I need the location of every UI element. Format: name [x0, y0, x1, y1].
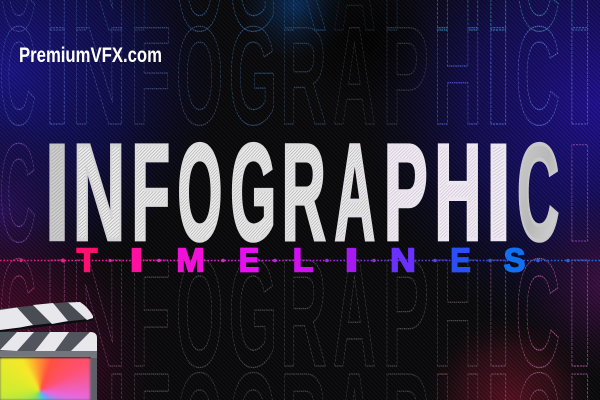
subtitle: TIMELINES: L	[293, 243, 313, 279]
title: INFOGRAPHIC: F	[132, 115, 170, 269]
outline row 4: I	[43, 228, 71, 399]
subtitle: TIMELINES: E	[450, 241, 471, 279]
outline row 2: I	[484, 0, 513, 155]
outline row 4: F	[130, 229, 171, 400]
outline row 4: I	[484, 226, 513, 399]
outline row 2: P	[382, 0, 429, 154]
title: INFOGRAPHIC: C	[517, 117, 559, 269]
outline row 2: H	[433, 0, 482, 154]
outline row 2: R	[280, 0, 327, 155]
outline row 4: C	[0, 228, 36, 400]
outline row 4: G	[229, 227, 277, 399]
icon: clapperboard	[0, 302, 97, 400]
outline row 2: A	[333, 0, 376, 154]
title: INFOGRAPHIC: R	[282, 117, 326, 269]
outline row 4: A	[333, 226, 376, 399]
outline row 2: O	[176, 0, 223, 154]
outline row 4: P	[382, 228, 429, 399]
subtitle: TIMELINES: I	[129, 242, 144, 279]
title: INFOGRAPHIC: O	[178, 117, 222, 269]
title: INFOGRAPHIC: G	[230, 117, 276, 269]
outline row 4: N	[71, 227, 127, 399]
outline row 2: C	[516, 0, 560, 154]
clapper arm and body	[0, 302, 97, 400]
outline row 4: O	[176, 227, 223, 399]
subtitle: TIMELINES: M	[176, 243, 205, 279]
outline row 2: F	[130, 0, 171, 155]
outline row 2: C	[0, 0, 36, 155]
outline row 4: R	[280, 228, 327, 400]
subtitle: TIMELINES: N	[390, 243, 416, 279]
outline row 3: I	[565, 114, 595, 271]
outline row 2: G	[229, 0, 277, 154]
outline row 5	[43, 340, 595, 400]
title: INFOGRAPHIC: I	[44, 116, 70, 269]
subtitle: TIMELINES: S	[504, 241, 525, 279]
outline row 2: I	[565, 0, 595, 154]
outline row 4	[0, 226, 595, 400]
outline row 2: N	[71, 0, 127, 154]
title: INFOGRAPHIC: H	[434, 116, 481, 269]
outline row 2	[0, 0, 595, 155]
colour wheel screen	[0, 358, 90, 400]
outline row 3	[0, 114, 595, 272]
outline row 2: I	[43, 0, 71, 154]
logo: PremiumVFX.com: PremiumVFX.com	[19, 44, 162, 67]
outline row 4: H	[433, 228, 482, 400]
title: INFOGRAPHIC: A	[334, 117, 375, 270]
outline row 4: I	[565, 228, 595, 399]
title: INFOGRAPHIC: N	[73, 117, 125, 269]
outline row 3: C	[0, 116, 36, 272]
title: INFOGRAPHIC: P	[384, 116, 428, 269]
title: INFOGRAPHIC: I	[486, 116, 511, 269]
subtitle: TIMELINES: I	[344, 242, 359, 279]
subtitle: TIMELINES: E	[239, 241, 259, 279]
outline row 4: C	[516, 227, 560, 399]
outline row 1	[0, 0, 595, 61]
subtitle: TIMELINES: T	[77, 243, 97, 279]
